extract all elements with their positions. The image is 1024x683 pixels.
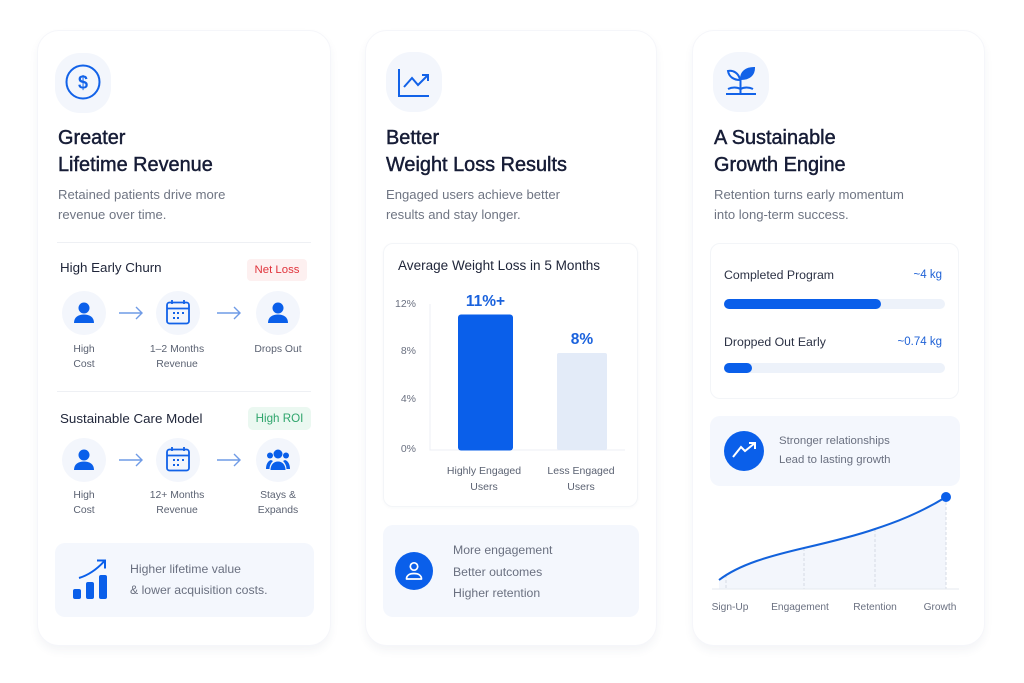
callout: stronger relationships	[710, 416, 960, 486]
label: stays and expands: Expands	[258, 505, 298, 516]
text: engaged users: Engaged users achieve better	[386, 187, 560, 202]
label: high cost: Cost	[73, 359, 95, 370]
icon: sprout	[713, 52, 769, 112]
label: 12+ months revenue	[150, 490, 204, 516]
bar chart: 12%	[395, 298, 416, 310]
badge: net loss	[247, 259, 307, 281]
icon: dollar: $	[78, 72, 88, 92]
icon: group	[256, 438, 300, 482]
bar chart: 4%	[401, 393, 416, 405]
bar chart: Users	[567, 481, 595, 493]
progress bar: completed	[724, 299, 945, 309]
icon: person high cost	[62, 438, 106, 482]
icon: calendar	[156, 438, 200, 482]
text: higher lifetime value	[130, 562, 268, 597]
chart card: average weight loss	[383, 243, 638, 507]
icon: line chart	[386, 52, 442, 112]
line chart: growth curve: Retention	[853, 602, 897, 613]
panel: weight loss results	[365, 30, 657, 646]
text: retained patients: Retained patients drive more	[58, 187, 225, 202]
progress card	[710, 243, 959, 399]
badge: high roi: High ROI	[256, 412, 303, 425]
icon: person high cost	[62, 291, 106, 335]
callout: more engagement	[383, 525, 639, 617]
label: 1-2 months revenue: 1–2 Months	[150, 344, 204, 355]
label: stays and expands	[258, 490, 298, 516]
text: retention turns: into long-term success.	[714, 206, 849, 222]
text: engagement list: Better outcomes	[453, 564, 542, 578]
text: engagement list	[453, 543, 552, 600]
text: retained patients: revenue over time.	[58, 206, 166, 222]
bar chart: 8%	[571, 331, 593, 348]
heading: greater lifetime revenue: Greater	[58, 127, 125, 149]
label: high cost: High	[73, 490, 95, 501]
label: high cost	[73, 344, 95, 370]
label: completed program: Completed Program	[724, 268, 834, 282]
callout: higher lifetime value	[55, 543, 314, 617]
value: 0.74 kg: ~0.74 kg	[898, 336, 942, 348]
label: high cost: Cost	[73, 505, 95, 516]
label: high cost	[73, 490, 95, 516]
heading: a sustainable growth engine: Growth Engine	[714, 154, 846, 176]
line chart: growth curve: Growth	[924, 602, 956, 613]
bar chart: Users	[470, 481, 498, 493]
label: 12+ months revenue: Revenue	[156, 505, 198, 516]
subheading: sustainable care model: Sustainable Care Model	[60, 411, 202, 426]
icon: dollar	[55, 53, 111, 113]
icon: rising bars	[73, 560, 107, 599]
label: high cost: High	[73, 344, 95, 355]
bar chart	[395, 293, 625, 493]
subheading: high early churn: High Early Churn	[60, 260, 162, 275]
heading: better weight loss results: Weight Loss Results	[386, 154, 567, 176]
arrow	[217, 306, 241, 320]
text: stronger relationships: Stronger relationships	[779, 435, 890, 447]
bar chart: 0%	[401, 443, 416, 455]
chart title: Average Weight Loss in 5 Months	[398, 258, 600, 273]
bar chart: Less Engaged	[547, 465, 615, 477]
arrow	[119, 454, 143, 466]
arrow	[217, 454, 241, 466]
text: higher lifetime value: Higher lifetime value	[130, 562, 241, 576]
text: engagement list: Higher retention	[453, 586, 540, 600]
label: 12+ months revenue: 12+ Months	[150, 490, 204, 501]
text: higher lifetime value: & lower acquisition costs.	[130, 583, 268, 597]
icon: trend circle	[724, 431, 764, 471]
bar chart: Highly Engaged	[447, 465, 521, 477]
panel: growth engine	[692, 30, 985, 646]
panel: lifetime revenue	[37, 30, 331, 646]
progress bar: dropped	[724, 363, 945, 373]
badge: high roi	[248, 407, 311, 430]
arrow	[119, 306, 143, 320]
text: retained patients	[58, 187, 225, 222]
heading: greater lifetime revenue	[58, 127, 213, 176]
heading: better weight loss results	[386, 127, 567, 176]
heading: greater lifetime revenue: Lifetime Revenue	[58, 154, 213, 176]
line chart: growth curve: Sign-Up	[712, 602, 749, 613]
value: 4 kg: ~4 kg	[914, 269, 942, 281]
heading: a sustainable growth engine: A Sustainable	[714, 127, 836, 149]
icon: person drops out	[256, 291, 300, 335]
text: retention turns	[714, 187, 904, 222]
text: engaged users: results and stay longer.	[386, 206, 521, 222]
label: dropped out early: Dropped Out Early	[724, 335, 826, 349]
line chart: growth curve: Engagement	[771, 602, 829, 613]
text: stronger relationships: Lead to lasting growth	[779, 454, 890, 466]
icon: calendar	[156, 291, 200, 335]
line chart: growth curve	[712, 492, 959, 613]
bar chart: 8%	[401, 345, 416, 357]
text: engagement list: More engagement	[453, 543, 552, 557]
heading: better weight loss results: Better	[386, 127, 439, 149]
badge: net loss: Net Loss	[255, 264, 299, 276]
label: 1-2 months revenue: Revenue	[156, 359, 198, 370]
heading: a sustainable growth engine	[714, 127, 846, 176]
text: retention turns: Retention turns early momentum	[714, 187, 904, 202]
text: stronger relationships	[779, 435, 890, 466]
text: engaged users	[386, 187, 560, 222]
bar chart: 11%+	[466, 293, 505, 310]
label: drops out: Drops Out	[254, 344, 302, 355]
label: stays and expands: Stays &	[260, 490, 296, 501]
label: 1-2 months revenue	[150, 344, 204, 370]
icon: user circle	[395, 552, 433, 590]
